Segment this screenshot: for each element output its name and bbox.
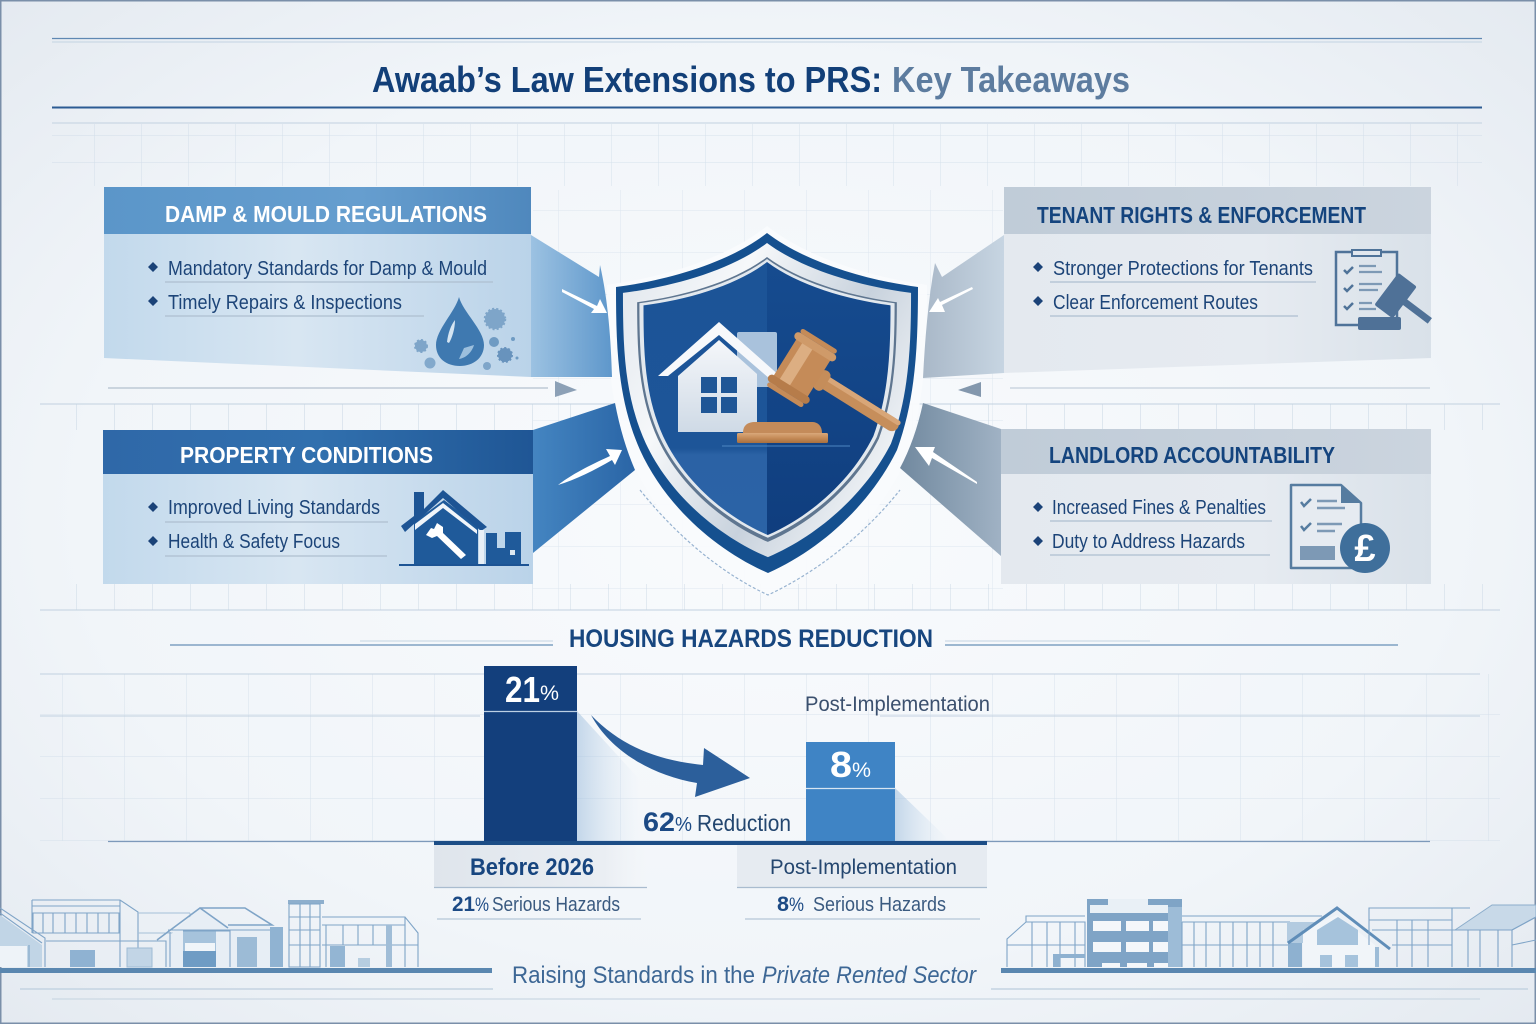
title rule top (52, 38, 1482, 40)
bullet list: Timely Repairs & Inspections (168, 292, 402, 314)
arrow: white top left (562, 289, 607, 313)
footer tagline: Raising Standards in the (512, 962, 755, 989)
icon: house with wrench (399, 490, 529, 566)
bullet list (1033, 258, 1316, 316)
bullet list: Duty to Address Hazards (1052, 531, 1245, 553)
caption: 8% serious hazards: 8 (777, 893, 789, 916)
footer tagline: Private Rented Sector (762, 962, 977, 989)
icon: document and pound (1291, 485, 1390, 573)
arrow: white bottom left (558, 449, 622, 485)
gavel base (722, 422, 850, 446)
small arrow: left (555, 381, 577, 397)
skyline: left (0, 900, 492, 973)
bullet list: Mandatory Standards for Damp & Mould (168, 258, 487, 280)
panel: landlord accountability (1001, 429, 1431, 584)
title rule second (52, 41, 1482, 43)
gavel handle and head (764, 326, 916, 457)
skyline: right (1001, 899, 1536, 973)
bar: post-implementation: % (852, 759, 871, 782)
funnel: landlord to shield (900, 403, 1001, 556)
label box: before 2026: Before 2026 (470, 854, 594, 881)
panel header (103, 430, 533, 474)
bullet list: Stronger Protections for Tenants (1053, 258, 1313, 280)
shield outer border (616, 233, 918, 573)
panel header: LANDLORD ACCOUNTABILITY (1049, 442, 1335, 468)
footer rule two (52, 998, 1480, 1000)
shield dashed tip (640, 490, 900, 595)
arrow: reduction (591, 715, 750, 797)
panel body (1004, 234, 1431, 373)
caption: 21% serious hazards (437, 893, 641, 919)
funnel: property to shield (533, 403, 635, 553)
bar: post-implementation (806, 742, 895, 841)
caption: 8% serious hazards: Serious Hazards (813, 894, 946, 916)
section heading: housing hazards reduction: HOUSING HAZARDS REDUCTION (569, 625, 933, 653)
bullet list (148, 497, 388, 556)
background grid (40, 123, 1500, 841)
icon: document and pound: £ (1354, 528, 1376, 570)
shield thin line (637, 257, 897, 542)
arrow: white top right (929, 287, 973, 312)
panel header: PROPERTY CONDITIONS (180, 442, 433, 468)
label: 62% reduction: 62 (643, 807, 675, 837)
caption: 21% serious hazards: % (475, 895, 489, 916)
title: Key Takeaways (892, 59, 1130, 100)
caption: 21% serious hazards: 21 (452, 893, 475, 916)
arrow: white bottom right (915, 447, 977, 484)
panel header (1001, 429, 1431, 474)
bullet list (148, 258, 493, 316)
panel: damp and mould (104, 187, 531, 377)
label box: post-implementation (737, 845, 987, 888)
panel header (104, 187, 531, 234)
axis line (108, 840, 1430, 842)
chart base bar (434, 841, 987, 845)
label: 62% reduction: % (675, 814, 692, 836)
bullet list: Health & Safety Focus (168, 531, 340, 553)
icon: gavel (722, 326, 916, 457)
bullet list: Improved Living Standards (168, 497, 380, 519)
shield silver ring (623, 243, 911, 557)
funnel: damp to shield (531, 235, 612, 377)
title underline (52, 106, 1482, 108)
shield emblem (616, 233, 918, 573)
icon: water drop and mould (415, 297, 518, 370)
panel header: DAMP & MOULD REGULATIONS (165, 201, 487, 227)
caption: 21% serious hazards: Serious Hazards (492, 894, 620, 916)
footer rule one (20, 988, 1528, 990)
shield blue field (644, 262, 890, 535)
bullet list (1033, 497, 1272, 555)
small arrow: right (958, 382, 981, 397)
bar shadows (577, 711, 950, 841)
label: 62% reduction: Reduction (697, 810, 791, 836)
label box: before 2026 (434, 845, 647, 888)
bar: before 2026: % (540, 682, 559, 705)
panel body (1001, 474, 1431, 584)
icon: clipboard and gavel (1336, 250, 1442, 337)
panel header: TENANT RIGHTS & ENFORCEMENT (1037, 202, 1366, 228)
caption: 8% serious hazards: % (789, 895, 804, 916)
shield halo (607, 226, 927, 597)
panel: tenant rights (1004, 187, 1442, 373)
bar: before 2026 (484, 666, 577, 841)
caption: 8% serious hazards (745, 893, 980, 919)
title: Awaab’s Law Extensions to PRS: (372, 59, 882, 100)
label box: post-implementation: Post-Implementation (770, 856, 957, 879)
label: post-implementation above bar: Post-Implementation (805, 693, 990, 716)
bar: before 2026: 21 (505, 669, 540, 710)
bar: post-implementation: 8 (830, 744, 852, 785)
icon: house (658, 322, 781, 432)
chart: hazards bar chart (108, 666, 1430, 919)
shield inner silver (639, 259, 895, 538)
bullet list: Increased Fines & Penalties (1052, 497, 1266, 519)
funnel: tenant to shield (923, 235, 1004, 378)
panel body (103, 474, 533, 584)
panel header (1004, 187, 1431, 234)
panel body (104, 234, 531, 377)
bullet list: Clear Enforcement Routes (1053, 292, 1258, 314)
panel: property conditions (103, 430, 533, 584)
